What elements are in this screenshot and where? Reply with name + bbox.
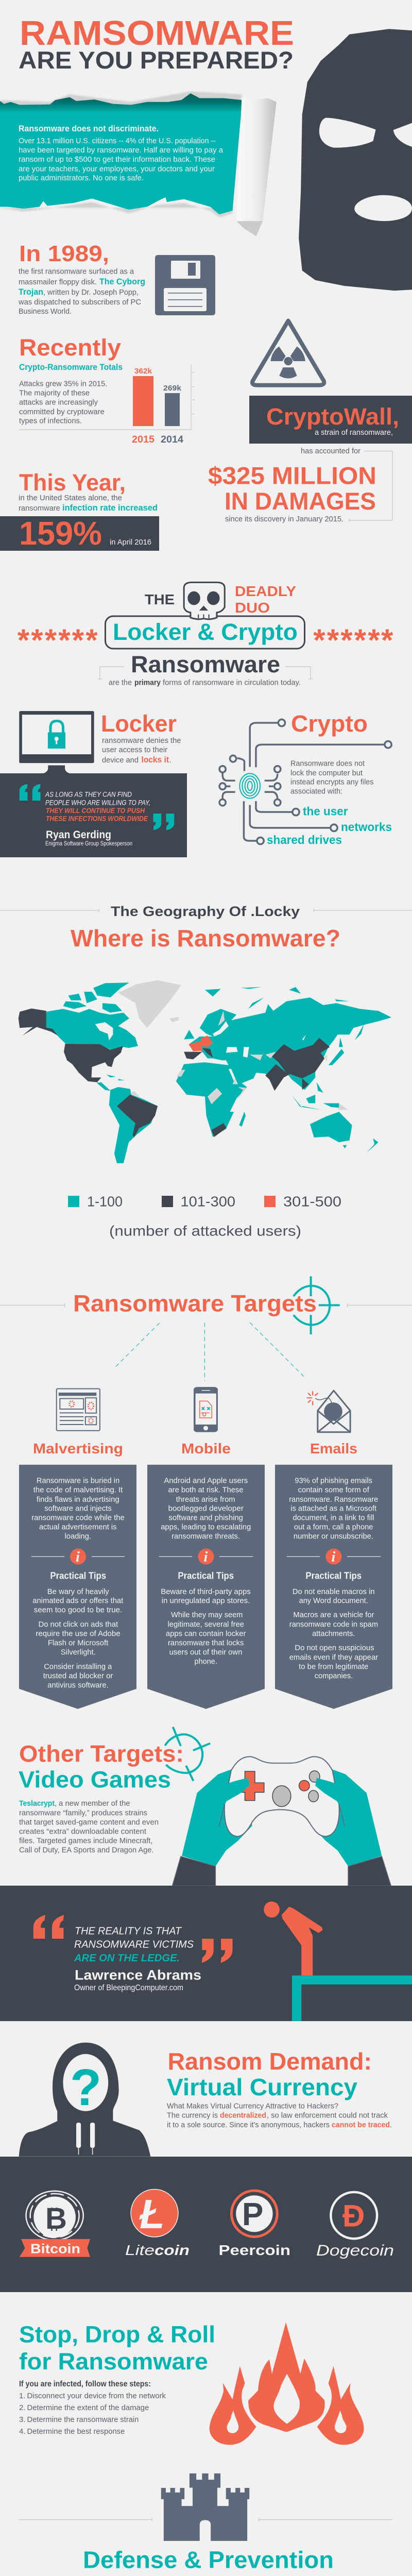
icon: tilted crosshair [165, 1727, 210, 1781]
panel: currencies band [0, 2157, 412, 2292]
text block: stop drop roll: Disconnect your device from the network [27, 2392, 166, 2400]
text block: damages: has accounted for [301, 447, 360, 455]
callout: cryptowall [249, 396, 412, 444]
panel: malvertising: the code of malvertising. It [33, 1486, 123, 1494]
panel: emails: to be from legitimate [299, 1663, 368, 1671]
dashed connector lines [115, 1323, 304, 1381]
panel: emails: Do not open suspicious [295, 1643, 374, 1652]
text block: ransom demand: , so law enforcement could not track [267, 2111, 388, 2120]
text block: stop drop roll: 3. [19, 2415, 26, 2424]
heading: defense and prevention: Defense & Prevention [83, 2547, 334, 2573]
panel: malvertising: Consider installing a [44, 1663, 112, 1671]
text block: ransom demand: The currency is [167, 2111, 218, 2120]
icon: info divider [159, 1549, 253, 1565]
panel: torn paper intro [0, 92, 277, 236]
legend: 301-500 [283, 1193, 341, 1210]
panel: crypto: Ransomware does not [290, 759, 365, 768]
panel: emails: ransomware code in spam [289, 1620, 378, 1629]
panel: torn paper intro: ransom of up to $500 to get their information back. These [19, 155, 215, 164]
title: RAMSOMWARE [20, 14, 294, 53]
text block: recently: committed by cryptoware [19, 408, 105, 416]
callout: ryan gerding quote [0, 773, 187, 857]
heading: geography: Where is Ransomware? [71, 925, 340, 952]
text block: ransom demand: . [390, 2121, 392, 2129]
icon: litecoin: Lite [125, 2242, 154, 2258]
panel: locker: locks it [141, 755, 169, 765]
panel: mobile: apps can contain locker [166, 1630, 246, 1638]
heading: the deadly duo: are the [109, 678, 132, 687]
text block: stop drop roll: If you are infected, follow these steps: [19, 2380, 151, 2388]
panel: emails: Emails [310, 1440, 357, 1456]
panel: mobile: in unregulated app stores. [162, 1597, 250, 1605]
panel: emails: Macros are a vehicle for [293, 1611, 374, 1619]
callout: ryan gerding quote: PEOPLE WHO ARE WILLING TO PAY, [45, 799, 150, 807]
panel: other targets video games: creates “extra” downloadable content [19, 1827, 147, 1836]
panel: mobile: bootlegged developer [168, 1504, 244, 1513]
callout: ryan gerding quote: AS LONG AS THEY CAN FIND [45, 790, 132, 799]
panel: malvertising [19, 1388, 136, 1709]
callout: ryan gerding quote: THEY WILL CONTINUE TO PUSH [46, 807, 145, 815]
icon: litecoin [125, 2189, 190, 2258]
panel: mobile: ransomware that locks [168, 1638, 244, 1647]
panel: emails: contain some form of [298, 1486, 370, 1494]
panel: malvertising: Be wary of heavily [47, 1587, 109, 1596]
text block: recently: Recently [19, 334, 121, 361]
icon: hooded hacker: ? [70, 2059, 101, 2116]
bar chart: crypto-ransomware totals [19, 364, 195, 445]
icon: info divider: i [332, 1549, 336, 1565]
panel: mobile: software and phishing [169, 1513, 243, 1522]
panel: mobile: phone. [195, 1657, 217, 1666]
chart: world map [19, 980, 391, 1163]
panel: crypto: Crypto [291, 710, 368, 737]
text block: stop drop roll: 2. [19, 2403, 26, 2412]
bar chart: crypto-ransomware totals: 362k [134, 367, 152, 376]
icon: flames [210, 2323, 364, 2445]
icon: quote marks [33, 1915, 233, 1963]
panel: mobile: users out of their own [169, 1648, 242, 1657]
icon: dogecoin: Ð [342, 2199, 365, 2233]
legend: (number of attacked users) [109, 1223, 301, 1239]
text block: this year: in the United States alone, the [19, 494, 122, 502]
bar chart: crypto-ransomware totals: 2015 [132, 434, 154, 445]
heading: the deadly duo: DEADLY [235, 583, 296, 599]
panel: mobile: are both at risk. These [168, 1486, 243, 1494]
panel: emails [275, 1391, 392, 1709]
text block: ransom demand: Virtual Currency [167, 2074, 357, 2100]
title: ARE YOU PREPARED? [19, 46, 294, 74]
panel: malvertising: trusted ad blocker or [43, 1672, 113, 1681]
text block: in 1989: massmailer floppy disk. [19, 278, 97, 286]
icon: quote marks [20, 784, 174, 830]
panel: emails: Practical Tips [305, 1571, 362, 1581]
icon: hands holding game controller [173, 1757, 391, 1886]
panel: other targets video games: Other Targets: [19, 1741, 184, 1767]
text block: in 1989 [18, 241, 145, 316]
legend: 101-300 [180, 1193, 235, 1210]
panel: lawrence abrams quote band: ARE ON THE LEDGE. [74, 1953, 180, 1964]
heading: ransomware targets [0, 1276, 412, 1381]
text block: stop drop roll [19, 2321, 215, 2436]
panel: torn paper intro: Over 13.1 million U.S. citizens -- 4% of the U.S. population -- [19, 137, 216, 145]
icon: litecoin: Ł [139, 2191, 165, 2237]
text block: this year: 159% [19, 515, 102, 552]
panel: mobile: apps, leading to escalating [161, 1522, 251, 1531]
panel: emails: any Word document. [299, 1597, 368, 1605]
text block: damages: since its discovery in January 2015. [225, 515, 344, 523]
panel: locker: user access to their [102, 745, 167, 754]
icon: radiation warning [252, 321, 324, 385]
text block: stop drop roll: Determine the best response [27, 2427, 125, 2436]
panel: malvertising: loading. [65, 1532, 91, 1541]
heading: the deadly duo: DUO [235, 600, 270, 616]
icon: bitcoin [20, 2191, 90, 2257]
panel: torn paper intro: public administrators. No one is safe. [19, 174, 144, 182]
panel: torn paper intro: are your teachers, your employees, your doctors and your [19, 165, 215, 173]
text block: damages: IN DAMAGES [225, 487, 376, 515]
panel: other targets video games: Call of Duty, EA Sports and Dragon Age. [19, 1845, 153, 1854]
panel: mobile: Mobile [181, 1440, 231, 1456]
bar chart: crypto-ransomware totals: 2014 [161, 434, 183, 445]
icon: info divider [31, 1549, 125, 1565]
panel: malvertising: Silverlight. [61, 1648, 96, 1657]
text block: recently: attacks are increasingly [19, 398, 98, 407]
text block: stop drop roll: for Ransomware [19, 2348, 208, 2375]
panel: locker: ransomware denies the [102, 736, 181, 745]
panel: mobile: legitimate, several free [168, 1620, 244, 1629]
panel: lawrence abrams quote band: Lawrence Abrams [75, 1967, 201, 1982]
callout: ryan gerding quote: THESE INFECTIONS WORLDWIDE [46, 815, 148, 822]
heading: the deadly duo: ****** [18, 623, 98, 657]
panel: emails: document, in a link to fill [293, 1513, 374, 1522]
icon: infected phone [194, 1387, 218, 1432]
panel: emails: companies. [315, 1672, 353, 1681]
panel: lawrence abrams quote band [0, 1886, 412, 2021]
text block: stop drop roll: 1. [19, 2392, 26, 2400]
icon: crosshair [294, 1276, 340, 1334]
text block: ransom demand [167, 2048, 392, 2129]
icon: dogecoin [316, 2192, 394, 2259]
panel: other targets video games: files. Targeted games include Minecraft, [19, 1836, 152, 1845]
text block: this year: ransomware [19, 504, 60, 513]
panel: crypto [219, 710, 392, 846]
panel: crypto: networks [341, 820, 392, 834]
panel: crypto: lock the computer but [290, 769, 363, 777]
panel: lawrence abrams quote band: THE REALITY IS THAT [75, 1926, 182, 1937]
icon: floppy disk [155, 255, 215, 315]
title [19, 14, 294, 74]
text block: stop drop roll: Stop, Drop & Roll [19, 2321, 215, 2347]
text block: damages [208, 447, 392, 523]
text block: ransom demand: decentralized [220, 2111, 266, 2120]
icon: info divider: i [204, 1549, 208, 1565]
heading: the deadly duo: Ransomware [131, 651, 280, 677]
icon: litecoin: coin [154, 2242, 190, 2258]
text block: ransom demand: What Makes Virtual Currency Attractive to Hackers? [167, 2102, 338, 2111]
panel: malvertising: antivirus software. [47, 1681, 109, 1689]
heading: the deadly duo: primary [134, 678, 161, 687]
text block: damages: $325 MILLION [208, 462, 376, 489]
panel: locker: . [169, 756, 171, 765]
panel: other targets video games: , a new member of the [55, 1799, 130, 1808]
text block: in 1989: the first ransomware surfaced as a [19, 267, 134, 276]
panel: malvertising: actual advertisement is [39, 1522, 116, 1531]
icon: person on the ledge [264, 1902, 412, 2021]
icon: info divider [287, 1549, 381, 1565]
icon: peercoin: Peercoin [218, 2242, 290, 2258]
panel: malvertising: seem too good to be true. [34, 1606, 122, 1615]
heading: ransomware targets: Ransomware Targets [73, 1290, 317, 1317]
panel: emails: 93% of phishing emails [295, 1477, 372, 1485]
panel: mobile: Beware of third-party apps [161, 1587, 251, 1596]
text block: recently: Crypto-Ransomware Totals [19, 362, 123, 372]
icon: bomb envelope [307, 1391, 350, 1432]
icon: bitcoin: B [45, 2202, 67, 2235]
panel: emails: Do not enable macros in [293, 1587, 375, 1596]
bar chart: crypto-ransomware totals: 269k [163, 384, 182, 393]
icon: info divider: i [76, 1549, 80, 1565]
panel: mobile: Android and Apple users [164, 1477, 248, 1485]
panel: malvertising: Malvertising [33, 1440, 123, 1456]
text block: this year [0, 469, 159, 552]
icon: fingerprint circuit [219, 719, 391, 844]
panel: emails: out a form, call a phone [294, 1522, 373, 1531]
icon: peercoin [218, 2191, 290, 2258]
heading: defense and prevention [19, 2473, 392, 2573]
text block: in 1989: The Cyborg [99, 277, 145, 286]
panel: malvertising: animated ads or offers that [32, 1597, 124, 1605]
panel: mobile: ransomware threats. [171, 1532, 240, 1541]
panel: lawrence abrams quote band: Owner of BleepingComputer.com [74, 1984, 183, 1992]
text block: stop drop roll: 4. [19, 2427, 26, 2436]
icon: web page [57, 1388, 100, 1431]
heading: the deadly duo [18, 582, 393, 687]
text block: stop drop roll: Determine the ransomware strain [27, 2415, 139, 2424]
text block: recently [19, 334, 123, 426]
icon: bitcoin: Bitcoin [30, 2241, 80, 2257]
panel: malvertising: Flash or Microsoft [48, 1638, 109, 1647]
callout: cryptowall: a strain of ransomware, [315, 428, 393, 437]
panel: crypto: instead encrypts any files [290, 778, 374, 786]
text block: in 1989: , written by Dr. Joseph Popp, [43, 288, 139, 297]
icon: peercoin: P [242, 2197, 263, 2232]
panel: other targets video games [19, 1727, 391, 1886]
text block: recently: types of infections. [19, 416, 82, 426]
callout: cryptowall: CryptoWall, [266, 403, 399, 430]
panel: mobile [147, 1387, 265, 1709]
panel: other targets video games: that target saved-game content and even [19, 1818, 159, 1826]
icon: hooded hacker [19, 2043, 150, 2157]
panel: lawrence abrams quote band: RANSOMWARE VICTIMS [74, 1939, 194, 1951]
icon: locked monitor [19, 711, 94, 773]
text block: in 1989: was dispatched to subscribers of PC [18, 298, 141, 307]
text block: this year: infection rate increased [62, 503, 158, 513]
text block: in 1989: Trojan [19, 287, 43, 297]
panel: emails: is attached as a Microsoft [290, 1504, 377, 1513]
panel: malvertising: ransomware code while the [31, 1513, 125, 1522]
panel: malvertising: finds flaws in advertising [37, 1495, 119, 1504]
heading: the deadly duo: forms of ransomware in circulation today. [163, 678, 301, 687]
panel: other targets video games: Teslacrypt [19, 1799, 55, 1808]
callout: ryan gerding quote: Ryan Gerding [46, 829, 111, 841]
text block: this year: in April 2016 [110, 538, 151, 547]
panel: malvertising: require the use of Adobe [36, 1630, 121, 1638]
heading: geography: The Geography Of .Locky [111, 904, 300, 919]
panel: torn paper intro: Ransomware does not discriminate. [19, 124, 159, 133]
text block: in 1989: Business World. [19, 307, 72, 316]
heading: the deadly duo: Locker & Crypto [113, 619, 298, 645]
panel: other targets video games: ransomware “family,” produces strains [19, 1808, 147, 1817]
icon: castle [161, 2473, 249, 2541]
panel: torn paper intro: have been targeted by ransomware. Half are willing to pay a [19, 146, 224, 155]
legend: 1-100 [87, 1193, 123, 1210]
panel: emails: attachments. [312, 1630, 355, 1638]
text block: ransom demand: it to a sole source. Since it's anonymous, hackers [167, 2121, 330, 2129]
heading: the deadly duo: THE [145, 591, 175, 607]
text block: recently: The majority of these [19, 388, 90, 398]
panel: locker: Locker [101, 710, 177, 737]
icon: balaclava mask [299, 29, 412, 291]
panel: locker [19, 710, 181, 773]
callout: ryan gerding quote: Enigma Software Group Spokesperson [45, 840, 132, 847]
panel: malvertising: Do not click on ads that [38, 1620, 118, 1629]
icon: dogecoin: Dogecoin [316, 2242, 394, 2259]
legend [68, 1193, 341, 1239]
text block: stop drop roll: Determine the extent of the damage [27, 2403, 149, 2412]
panel: crypto: associated with: [290, 787, 342, 795]
panel: crypto: shared drives [267, 833, 342, 846]
panel: locker: device and [102, 756, 139, 765]
panel: malvertising: software and injects [44, 1504, 112, 1513]
text block: in 1989: In 1989, [19, 241, 109, 266]
panel: other targets video games: Video Games [19, 1767, 171, 1793]
heading: the deadly duo: ****** [313, 623, 393, 657]
icon: skull [184, 582, 225, 619]
text block: ransom demand: cannot be traced [332, 2121, 390, 2129]
panel: malvertising: Ransomware is buried in [37, 1477, 119, 1485]
panel: malvertising: Practical Tips [50, 1571, 106, 1581]
panel: mobile: While they may seem [171, 1611, 243, 1619]
text block: ransom demand: Ransom Demand: [168, 2048, 372, 2075]
panel: mobile: Practical Tips [178, 1571, 234, 1581]
text block: recently: Attacks grew 35% in 2015. [19, 379, 107, 388]
panel: crypto: the user [303, 805, 348, 818]
heading: geography [0, 904, 412, 952]
panel: emails: ransomware. Ransomware [289, 1495, 378, 1504]
panel: emails: emails even if they appear [289, 1653, 378, 1662]
panel: mobile: threats arise from [176, 1495, 235, 1504]
text block: this year: This Year, [19, 469, 126, 496]
panel: emails: number or unsubscribe. [294, 1532, 373, 1541]
